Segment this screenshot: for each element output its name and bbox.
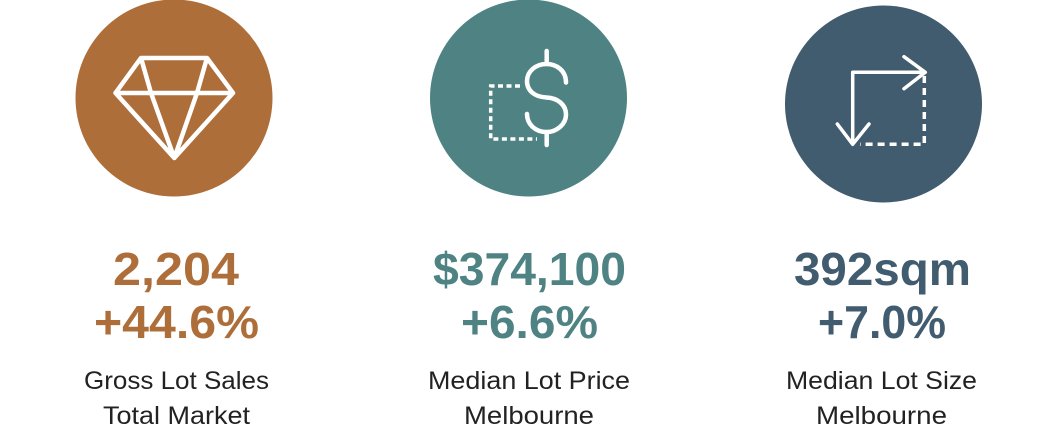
- label: melbourne: Melbourne: [464, 402, 594, 430]
- label: median lot size: Median Lot Size: [786, 367, 977, 395]
- icon: diamond in circle: [76, 0, 272, 196]
- label: median lot price: Median Lot Price: [428, 367, 630, 395]
- stat: median lot size change: +7.0%: [818, 296, 946, 348]
- stat: gross lot sales value: 2,204: [113, 243, 239, 295]
- stat: median lot price value: $374,100: [433, 243, 626, 295]
- panel: median lot size: [785, 6, 982, 430]
- icon: corner arrows with dashed square: [785, 6, 982, 202]
- stat: gross lot sales change: +44.6%: [94, 296, 259, 348]
- label: melbourne: Melbourne: [816, 402, 947, 430]
- stat: median lot price change: +6.6%: [461, 296, 598, 348]
- label: total market: Total Market: [103, 402, 250, 430]
- stat: median lot size value: 392sqm: [794, 243, 971, 295]
- icon: dollar sign with dashed square: [430, 0, 627, 196]
- panel: gross lot sales: [76, 0, 272, 430]
- label: gross lot sales: Gross Lot Sales: [84, 367, 269, 395]
- panel: median lot price: [428, 0, 630, 430]
